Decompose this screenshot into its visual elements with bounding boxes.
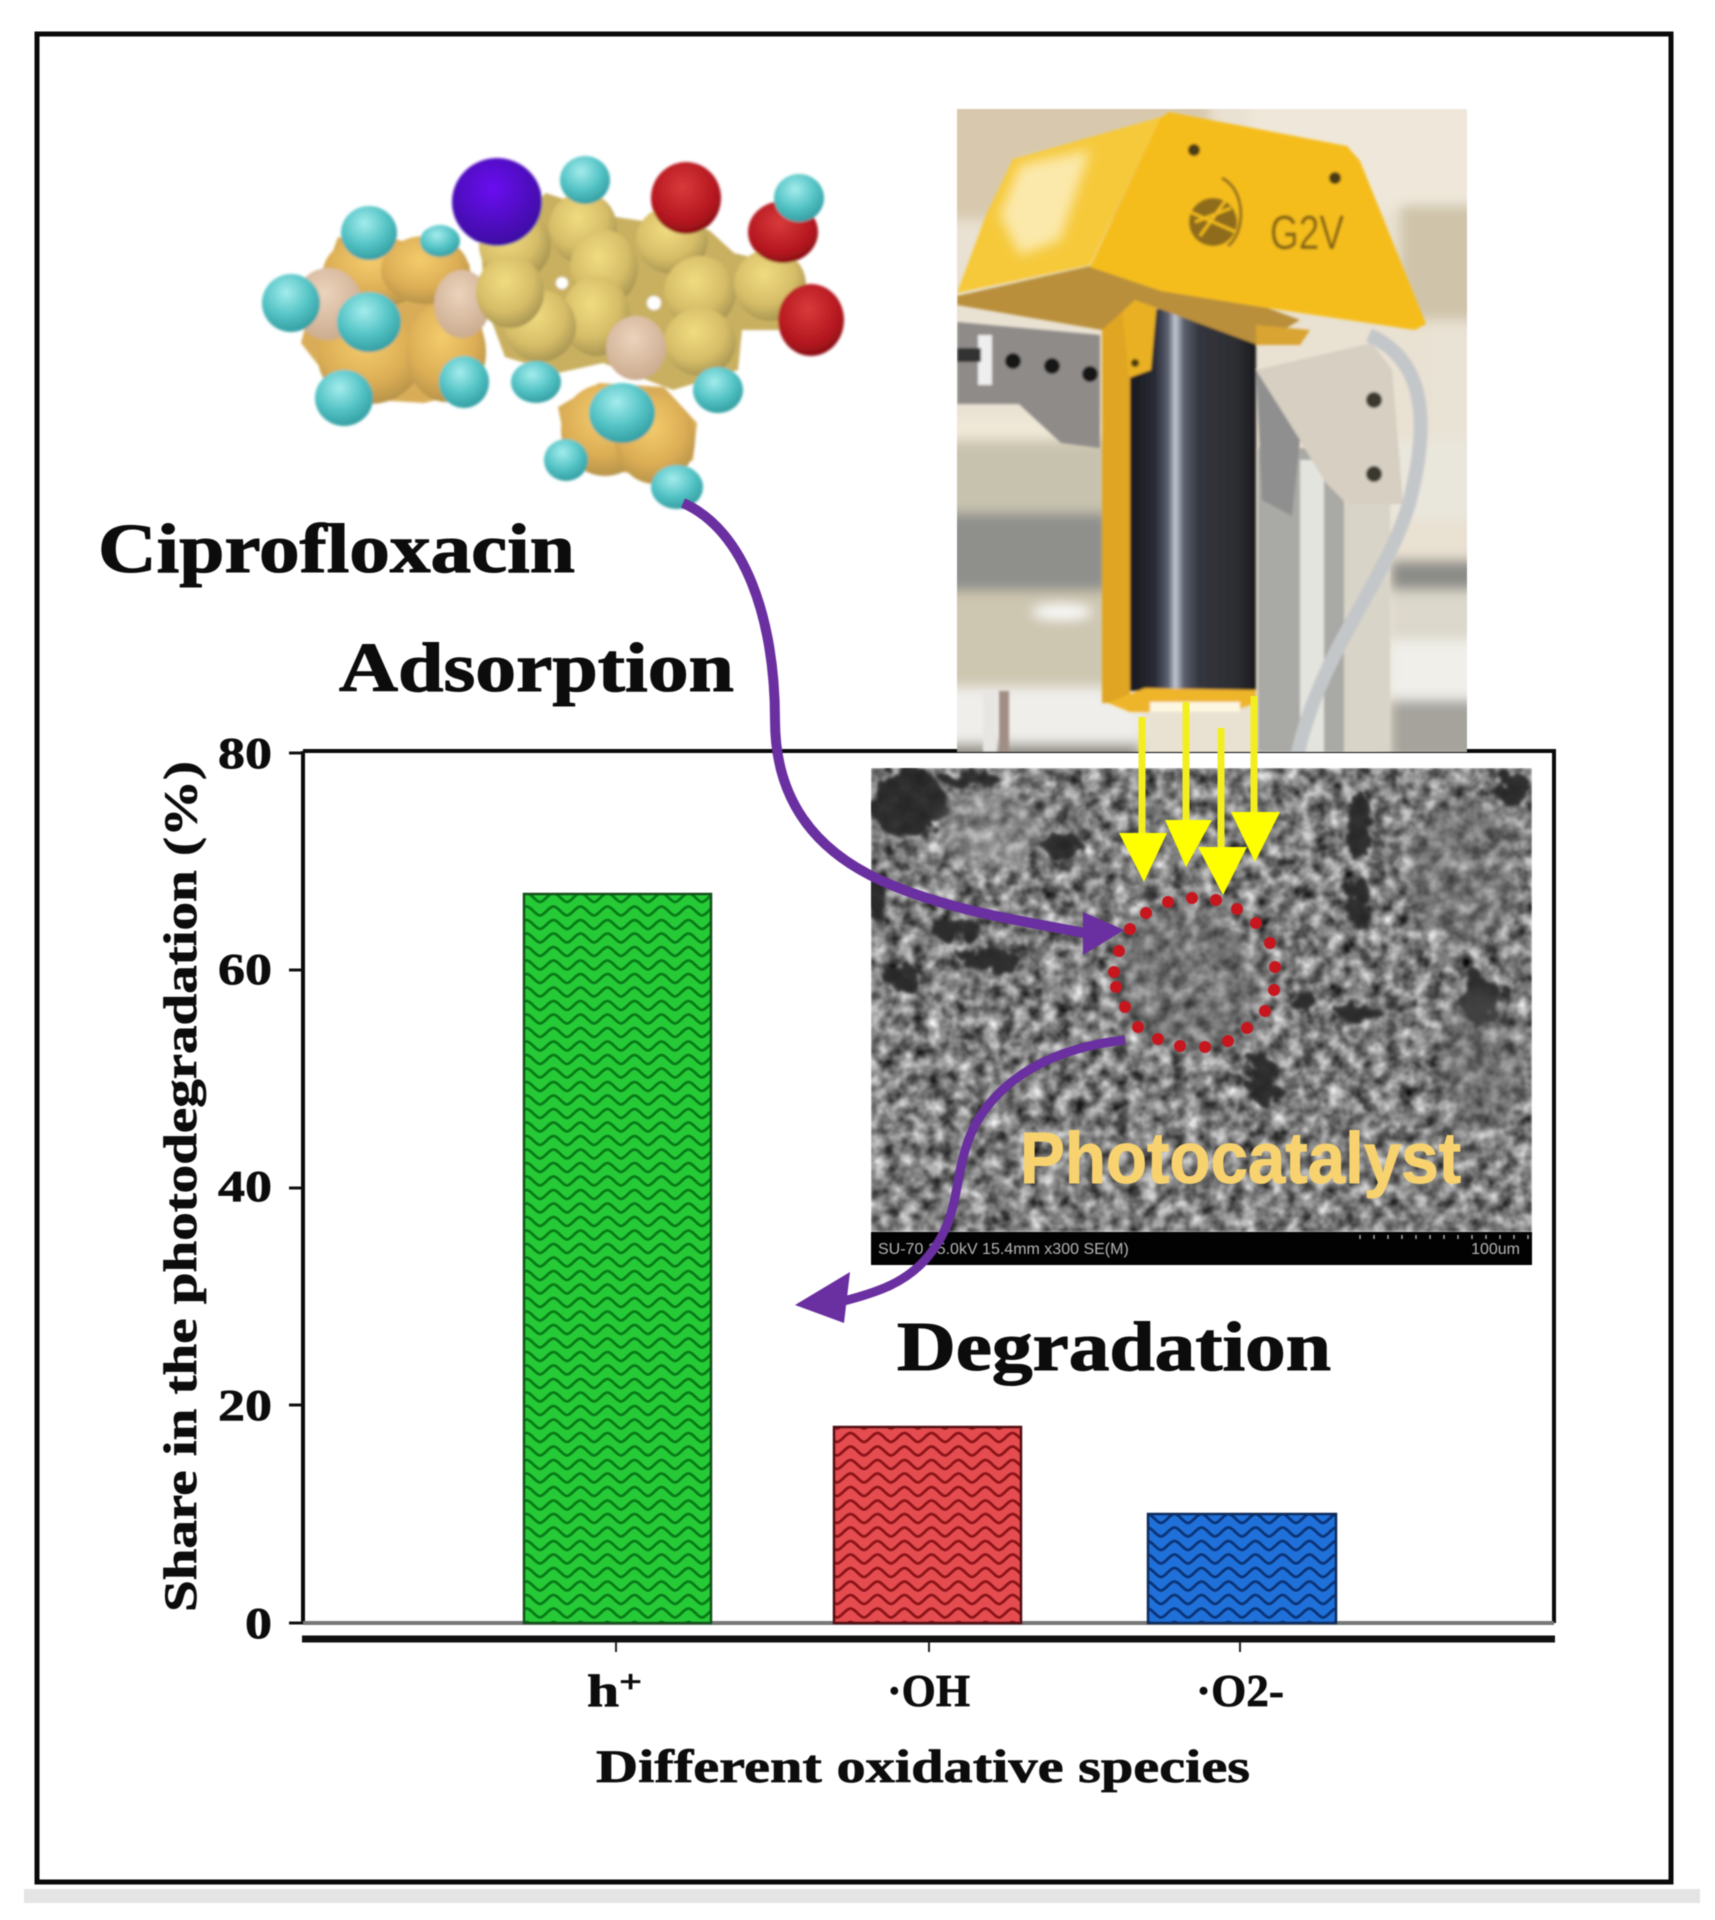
housing bolts [1188,144,1200,156]
y axis tick labels: 60 [218,945,272,994]
x axis category labels: ·O2- [1196,1665,1284,1716]
yellow post and base ring [1102,291,1130,703]
y axis tick labels [218,729,272,1648]
y axis tick labels: 20 [218,1381,272,1430]
G2V wordmark: G2V [1270,207,1344,260]
x axis category labels: + [619,1663,642,1699]
y axis title: Share in the photodegradation (%) [155,761,207,1612]
grey cable [1297,335,1421,757]
SEM dark and light regions [865,767,1531,1130]
G2V logo [1189,178,1241,246]
yellow gusset [1124,298,1159,380]
ring gaps [556,277,661,310]
x axis category labels: h [587,1665,613,1716]
oxygen atoms [651,162,844,356]
housing main face [1090,112,1426,330]
housing left face [957,117,1161,293]
y axis tick labels: 0 [245,1599,272,1648]
x axis category labels: ·OH [887,1665,970,1716]
molecular body silhouettes [301,193,803,477]
ring carbons [471,192,806,376]
chart frame and axes [289,751,1555,1652]
aluminium rail column [1258,448,1344,752]
purple arrow: adsorption [683,503,1124,955]
SEM info bar: 100um [1471,1241,1520,1258]
purple arrow: degradation [795,1040,1125,1323]
bottom grey strip [24,1889,1700,1903]
photo: G2V solar simulator lamp [956,108,1468,753]
nitrogen atoms [294,268,490,340]
SEM micrograph panel [865,767,1532,1265]
bar: O2- 10% [1148,1514,1336,1623]
SEM info bar: SU-70 15.0kV 15.4mm x300 SE(M) [878,1241,1129,1258]
side arm bracket [957,322,1100,448]
red dotted reaction circle [1108,892,1281,1053]
bar: OH 18% [834,1427,1021,1623]
x axis category labels [587,1663,1284,1716]
lamp cylinder [1130,309,1256,691]
SEM texture [871,768,1532,1232]
molecule: ciprofloxacin space-filling model [262,156,844,509]
hydrogen atoms [262,156,824,509]
y axis tick labels: 80 [218,729,272,778]
bar chart [155,729,1555,1793]
x axis title: Different oxidative species [596,1741,1250,1793]
label: Ciprofloxacin: Ciprofloxacin [98,511,575,588]
label: Adsorption: Adsorption [339,630,734,707]
label: Photocatalyst: Photocatalyst [1020,1119,1461,1199]
small stand at lower left [983,691,1009,752]
piperazine carbons [318,236,486,404]
SEM info bar [871,1232,1532,1265]
cyclopropyl carbons [561,384,695,484]
bar: h+ 67% [524,894,711,1623]
yellow light arrows [1119,696,1280,895]
y axis tick labels: 40 [218,1162,272,1211]
blurred photo background [956,108,1468,753]
nitrogen atom centre [606,316,666,380]
fluorine atom [452,158,542,246]
label: Degradation: Degradation [897,1309,1331,1386]
underside of housing [957,266,1300,345]
right mounting plate [1256,343,1403,504]
